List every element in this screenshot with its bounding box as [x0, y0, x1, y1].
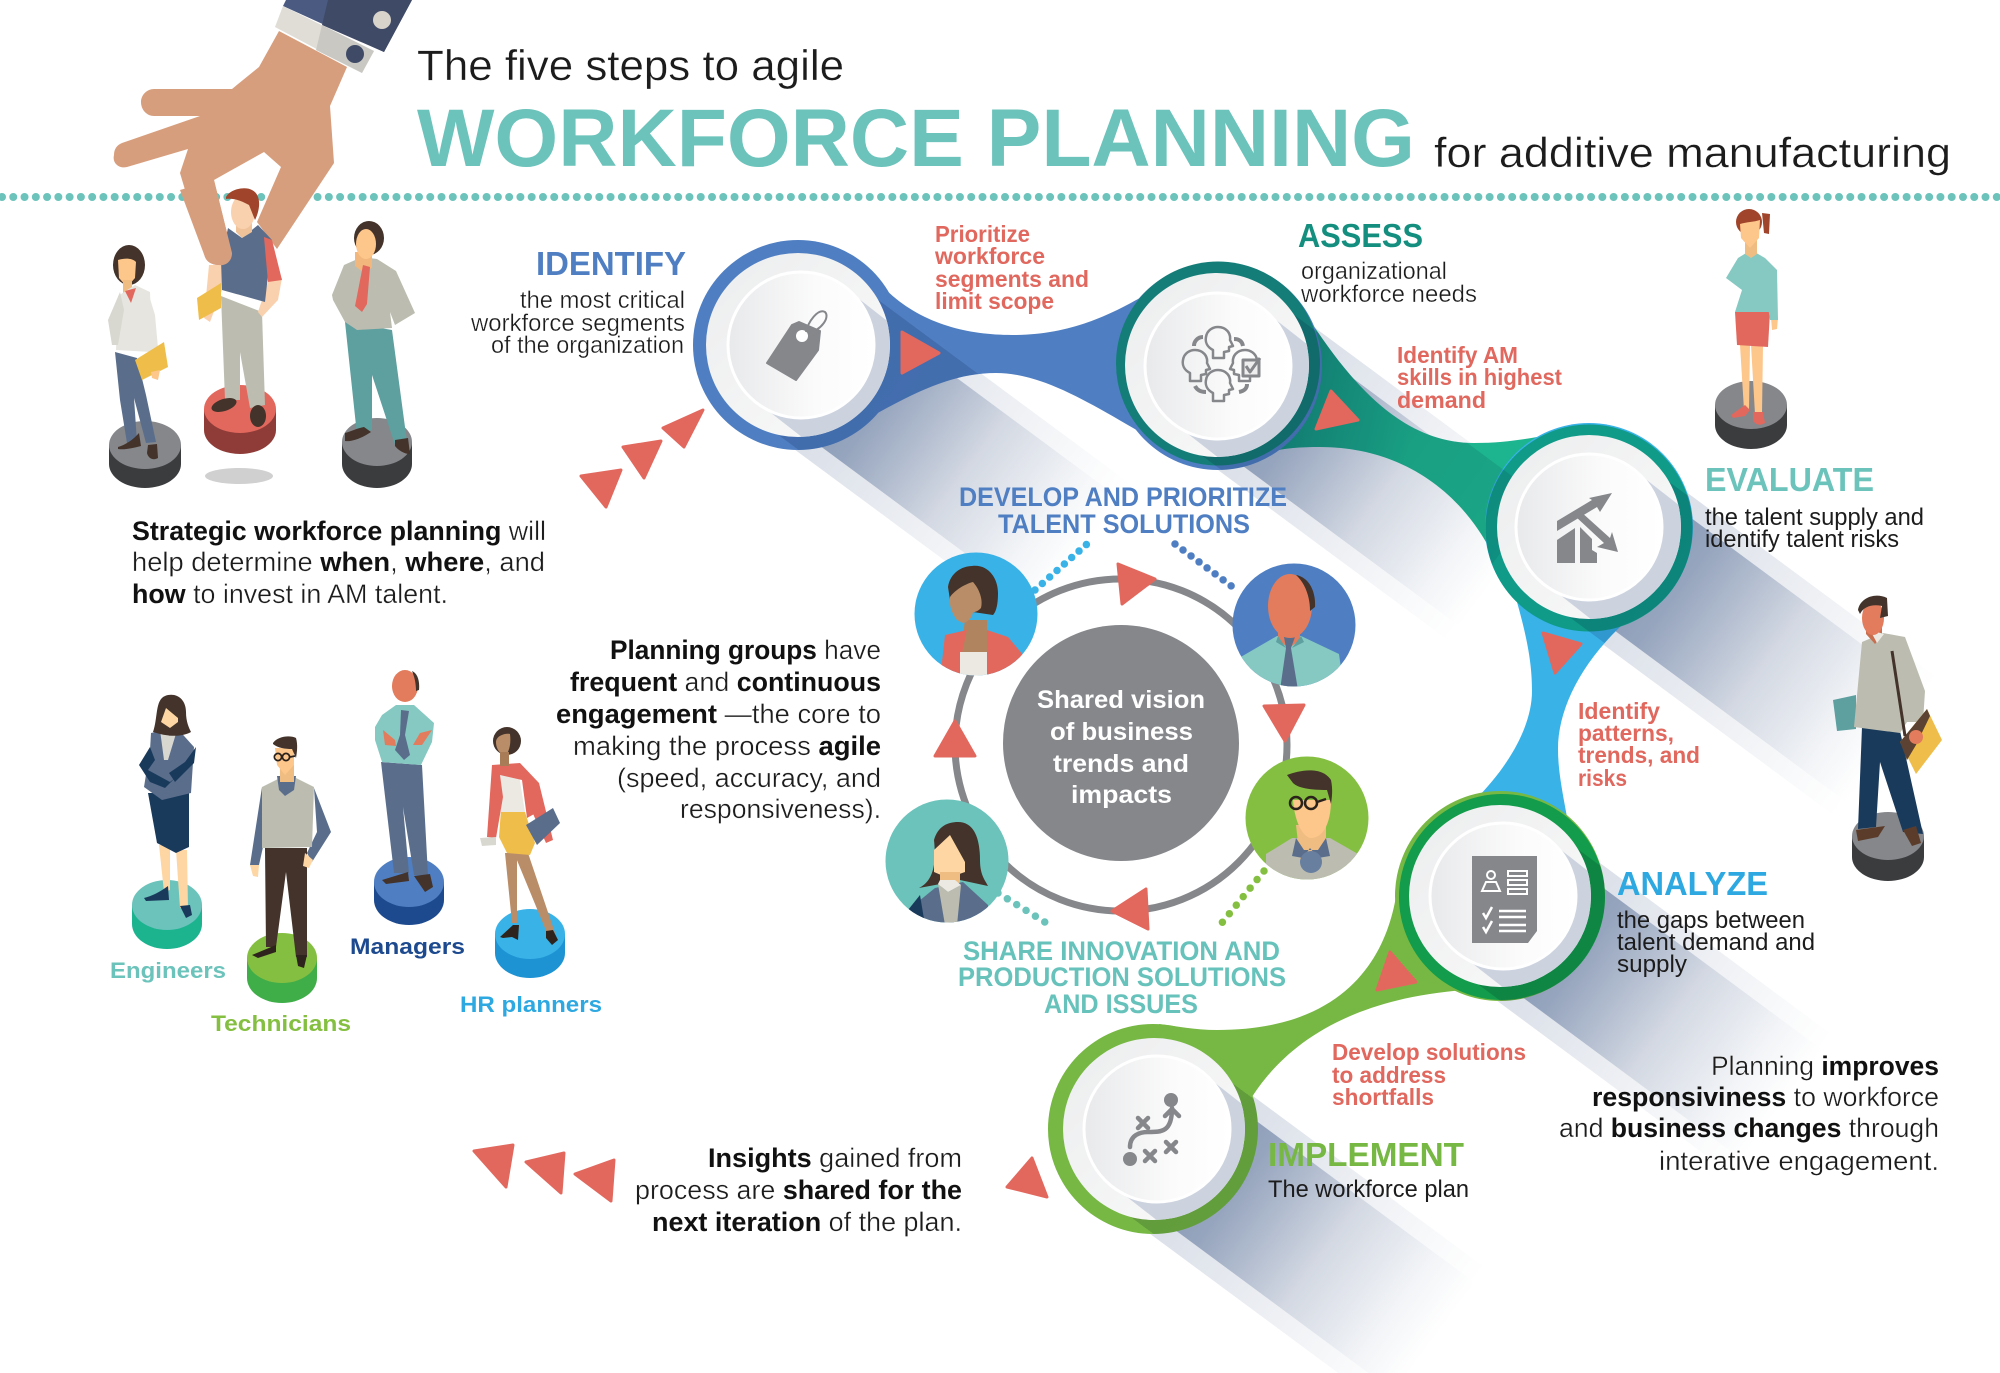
central vision circle: Shared vision — [1037, 686, 1205, 714]
callout: identify AM skills: Identify AM — [1397, 342, 1518, 368]
central vision circle: trends and — [1053, 750, 1189, 778]
central cycle ring — [955, 579, 1287, 911]
step label: identify — [470, 245, 686, 359]
avatar: HR planner — [914, 552, 1038, 676]
identify long shadow — [747, 276, 1131, 622]
paragraph: planning improves responsiveness: interative engagement. — [1659, 1146, 1939, 1176]
label: engineers: Engineers — [110, 958, 226, 983]
group: technician — [247, 736, 331, 1003]
callout: identify AM skills — [1397, 342, 1562, 413]
identify disc — [706, 253, 890, 437]
paragraph: planning improves responsiveness: responsiviness to workforce — [1592, 1082, 1939, 1112]
step 5: implement ring — [1048, 1024, 1258, 1234]
figure: woman in teal blouse — [1715, 209, 1787, 449]
paragraph: planning improves responsiveness: Planning improves — [1711, 1051, 1939, 1081]
arrow: chain of triangles bottom — [474, 1145, 614, 1201]
heading: share innovation: AND ISSUES — [1044, 989, 1198, 1019]
paragraph: planning groups: Planning groups have — [610, 635, 881, 665]
figure: woman in white jacket — [108, 245, 181, 488]
paragraph: planning groups: frequent and continuous — [570, 667, 881, 697]
paragraph: strategic workforce planning: Strategic workforce planning will — [132, 516, 546, 546]
central vision circle: impacts — [1071, 781, 1172, 809]
step label: evaluate: EVALUATE — [1705, 461, 1874, 498]
heading: share innovation — [958, 936, 1286, 1019]
callout: develop solutions: Develop solutions — [1332, 1039, 1526, 1065]
paragraph: planning groups: making the process agile — [573, 731, 881, 761]
arrow: chain of triangles top — [581, 410, 703, 507]
callout: identify AM skills: skills in highest — [1397, 364, 1562, 390]
dotted connector: dark blue — [1175, 544, 1234, 588]
title: for additive manufacturing — [1434, 129, 1951, 176]
step label: identify: the most critical — [520, 287, 685, 314]
step label: analyze: the gaps between — [1617, 907, 1805, 934]
callout: identify patterns: Identify — [1578, 698, 1660, 724]
step label: assess: ASSESS — [1298, 217, 1423, 254]
callout: identify patterns: risks — [1578, 765, 1627, 791]
implement long shadow — [1102, 1060, 1486, 1373]
dotted connector: teal — [998, 893, 1048, 924]
label: HR planners: HR planners — [460, 992, 602, 1017]
icon: people cycle with checkbox — [1183, 327, 1260, 401]
paragraph: planning groups: responsiveness). — [680, 794, 881, 824]
step label: implement — [1268, 1136, 1469, 1203]
hand and cuff — [114, 0, 412, 265]
step label: implement: IMPLEMENT — [1268, 1136, 1464, 1173]
label: managers: Managers — [350, 934, 465, 959]
paragraph: insights: process are shared for the — [635, 1175, 962, 1205]
callout: prioritize — [934, 221, 1089, 314]
callout: prioritize: segments and — [935, 266, 1089, 292]
figure: lifted man in vest — [180, 180, 282, 484]
callout: identify patterns — [1578, 698, 1700, 791]
assess long shadow — [1167, 294, 1551, 640]
central vision circle: of business — [1050, 718, 1193, 746]
paragraph: planning improves responsiveness — [1559, 1051, 1939, 1176]
step label: assess: organizational — [1301, 258, 1447, 285]
step label: analyze: talent demand and — [1617, 929, 1815, 956]
callout: identify patterns: trends, and — [1578, 742, 1700, 768]
paragraph: planning groups — [556, 635, 881, 824]
paragraph: strategic workforce planning: help determine when, where, and — [132, 547, 545, 577]
ribbon shading where the long shadows cross — [778, 300, 1693, 1234]
step label: evaluate: identify talent risks — [1705, 526, 1899, 553]
avatar: engineer — [886, 800, 1008, 922]
evaluate long shadow — [1538, 458, 1938, 816]
step label: assess: workforce needs — [1300, 281, 1477, 308]
implement disc — [1063, 1038, 1296, 1260]
step 3: evaluate ribbon and ring — [1475, 423, 1693, 896]
callout: prioritize: limit scope — [935, 288, 1054, 314]
callout: prioritize: Prioritize — [935, 221, 1030, 247]
step label: evaluate: the talent supply and — [1705, 504, 1924, 531]
step label: implement: The workforce plan — [1268, 1176, 1469, 1203]
icon: strategy play — [1123, 1093, 1179, 1166]
step label: analyze: supply — [1617, 951, 1687, 978]
analyze disc — [1409, 805, 1642, 1027]
dotted connector: blue — [1035, 544, 1087, 590]
title: The five steps to agile — [417, 42, 844, 90]
callout: identify AM skills: demand — [1397, 387, 1486, 413]
paragraph: planning improves responsiveness: and business changes through — [1559, 1113, 1939, 1143]
paragraph: planning groups: engagement —the core to — [556, 699, 881, 729]
dotted connector: green — [1221, 871, 1264, 924]
step label: assess — [1298, 217, 1477, 308]
evaluate disc — [1497, 435, 1681, 619]
step label: analyze — [1617, 865, 1815, 978]
paragraph: strategic workforce planning — [132, 516, 546, 609]
step label: identify: IDENTIFY — [536, 245, 686, 282]
paragraph: planning groups: (speed, accuracy, and — [617, 763, 881, 793]
arrow: ribbon triangles — [902, 332, 1581, 1197]
step label: evaluate — [1705, 461, 1924, 553]
analyze long shadow — [1449, 827, 1833, 1173]
icon: checklist document — [1472, 856, 1537, 943]
arrow: cycle triangles — [935, 564, 1304, 929]
step 2: assess ribbon and ring — [1114, 262, 1589, 553]
figure: man with red tie — [332, 221, 415, 488]
heading: share innovation: SHARE INNOVATION AND — [963, 936, 1280, 966]
step 4: analyze ribbon and ring — [1153, 791, 1605, 1129]
group: HR planner — [480, 727, 565, 978]
paragraph: insights — [635, 1143, 962, 1237]
heading: share innovation: PRODUCTION SOLUTIONS — [958, 962, 1286, 992]
icon: chart with arrows — [1557, 493, 1618, 563]
step label: analyze: ANALYZE — [1617, 865, 1768, 902]
paragraph: insights: next iteration of the plan. — [652, 1207, 962, 1237]
paragraph: strategic workforce planning: how to invest in AM talent. — [132, 579, 448, 609]
label: technicians: Technicians — [211, 1011, 351, 1036]
figure: man with messenger bag — [1833, 596, 1942, 881]
callout: identify patterns: patterns, — [1578, 720, 1674, 746]
central vision circle — [1003, 625, 1239, 861]
dotted header divider — [2, 193, 2000, 201]
callout: prioritize: workforce — [934, 243, 1045, 269]
heading: develop and prioritize — [959, 482, 1287, 539]
group: engineer — [132, 695, 202, 949]
title: WORKFORCE PLANNING — [417, 93, 1415, 184]
group: manager — [374, 670, 444, 925]
step label: identify: of the organization — [491, 332, 684, 359]
title — [417, 42, 1951, 184]
callout: develop solutions: shortfalls — [1332, 1084, 1434, 1110]
assess disc — [1125, 273, 1357, 497]
heading: develop and prioritize: TALENT SOLUTIONS — [998, 509, 1250, 539]
icon: price tag — [767, 311, 826, 380]
heading: develop and prioritize: DEVELOP AND PRIORITIZE — [959, 482, 1287, 512]
step 1: identify ribbon and ring — [693, 240, 1218, 450]
step label: identify: workforce segments — [470, 310, 685, 337]
callout: develop solutions: to address — [1332, 1062, 1446, 1088]
callout: develop solutions — [1332, 1039, 1526, 1110]
paragraph: insights: Insights gained from — [708, 1143, 962, 1173]
avatar: technician — [1246, 756, 1368, 880]
avatar: manager — [1232, 564, 1356, 686]
